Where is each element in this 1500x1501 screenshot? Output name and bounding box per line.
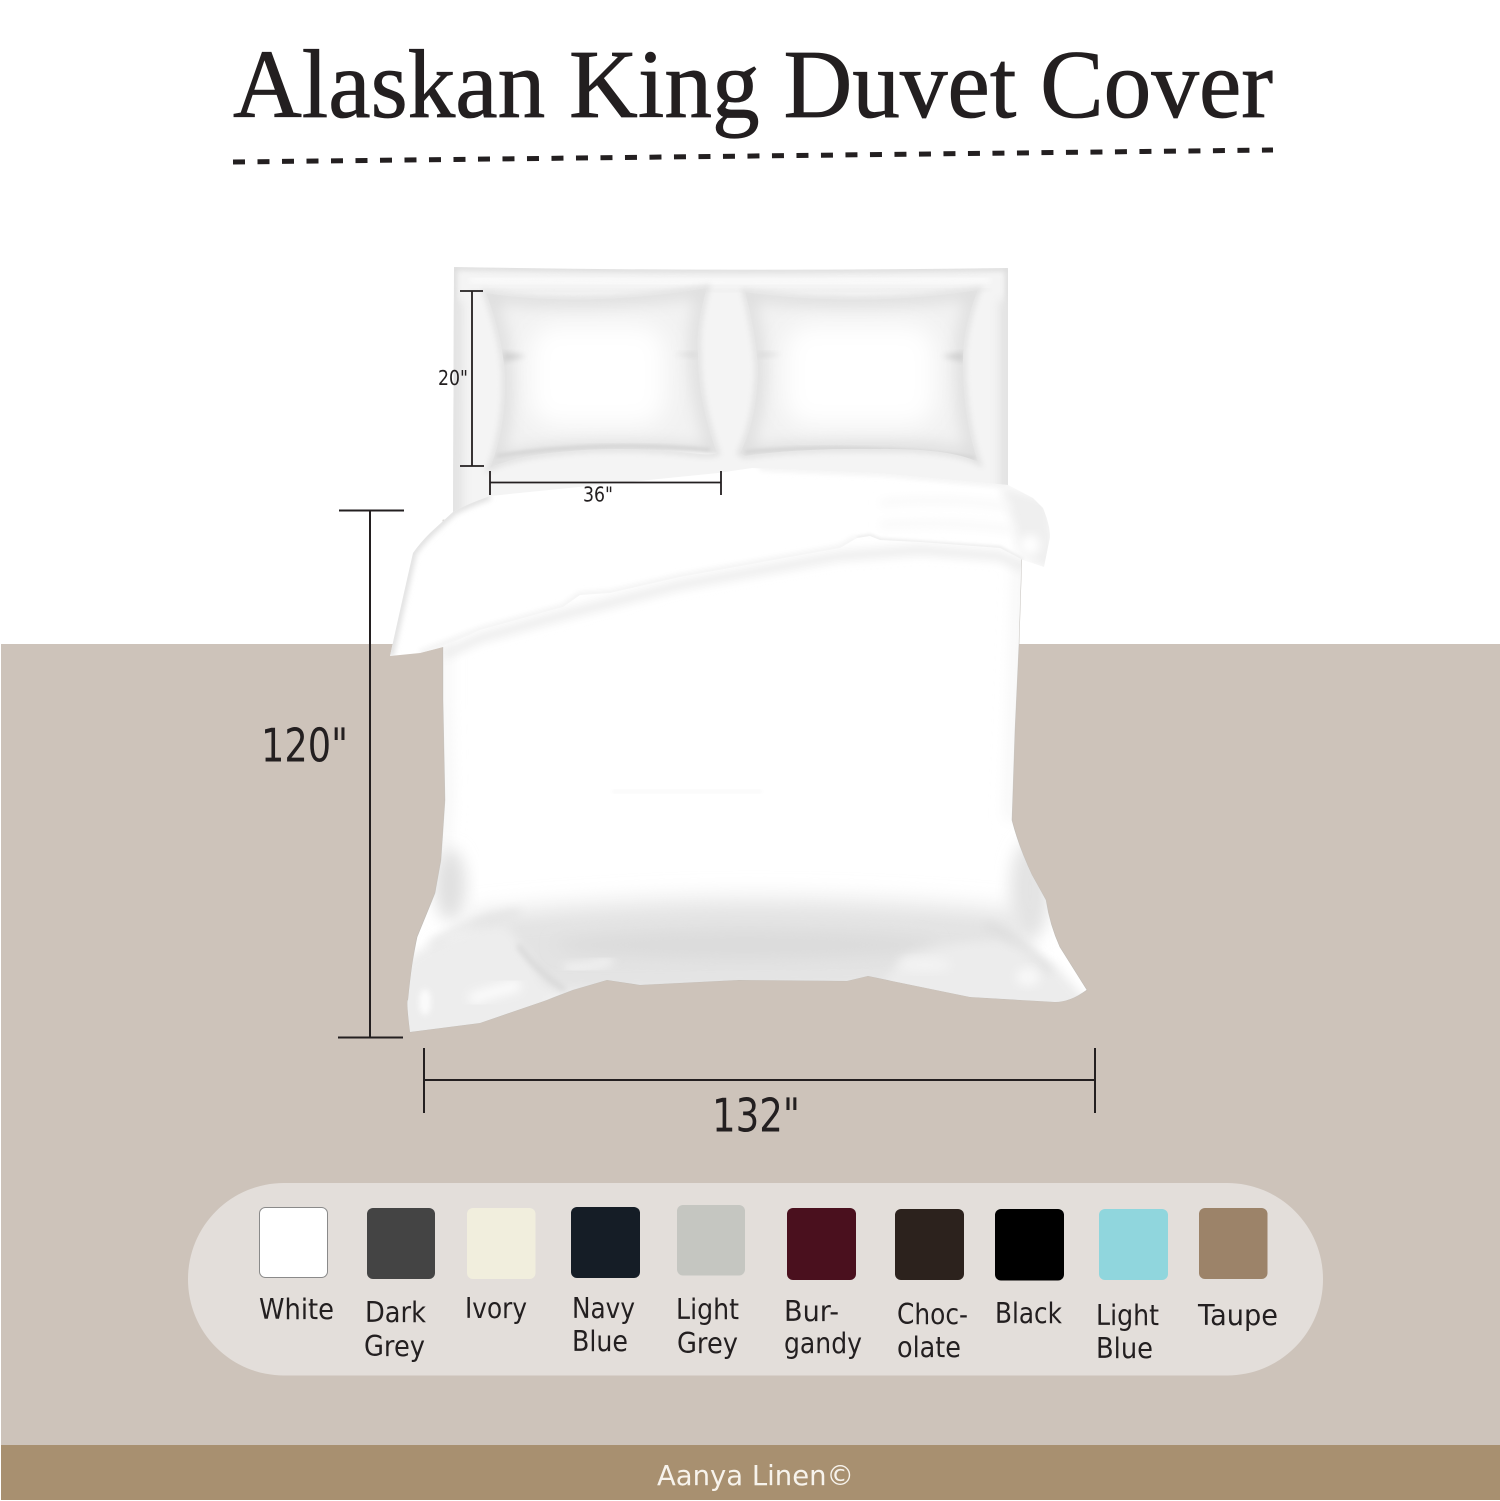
swatch: Chocolate: Choc- (897, 1298, 968, 1331)
swatch: Burgundy (784, 1208, 862, 1360)
duvet body (400, 520, 1100, 1050)
swatch: Dark Grey: Dark (365, 1296, 426, 1329)
duvet width dimension (424, 1048, 1095, 1142)
swatch: Chocolate: olate (897, 1331, 961, 1364)
pillow width dimension (490, 471, 721, 506)
swatch: Navy Blue: Navy (572, 1292, 635, 1325)
swatch: Light Blue (1096, 1209, 1168, 1365)
swatch: Taupe: Taupe (1197, 1299, 1278, 1332)
swatch: Chocolate (895, 1209, 968, 1364)
headboard (453, 267, 1008, 520)
duvet length dimension (261, 510, 404, 1038)
swatch: Black (995, 1209, 1064, 1330)
colour palette panel (188, 1183, 1323, 1376)
swatch: White (259, 1208, 334, 1326)
swatch: Taupe (1197, 1208, 1278, 1332)
swatch: Light Grey: Grey (677, 1327, 738, 1360)
label: 132 inches: 132" (712, 1088, 800, 1142)
label: 120 inches: 120" (261, 718, 348, 772)
duvet fold (390, 468, 1056, 656)
label: 20 inches: 20" (438, 366, 468, 390)
swatch: Dark Grey: Grey (364, 1330, 425, 1363)
footer band (1, 1445, 1500, 1500)
footer credit: Aanya Linen© (657, 1459, 854, 1492)
swatch: Light Blue: Light (1096, 1299, 1159, 1332)
swatch: Ivory: Ivory (465, 1292, 527, 1325)
title: Alaskan King Duvet Cover (233, 31, 1273, 138)
swatch: Light Blue: Blue (1096, 1332, 1153, 1365)
swatch: Light Grey (676, 1205, 745, 1360)
swatch: Burgundy: gandy (784, 1327, 862, 1360)
pillow height dimension (438, 291, 484, 466)
swatch: Light Grey: Light (676, 1293, 739, 1326)
bed illustration (390, 267, 1100, 1050)
right pillow (740, 290, 978, 462)
swatch: White: White (259, 1293, 334, 1326)
swatch: Ivory (465, 1208, 536, 1325)
swatch: Burgundy: Bur- (784, 1295, 839, 1328)
dashed title underline (233, 150, 1273, 162)
label: 36 inches: 36" (583, 482, 613, 506)
swatch: Navy Blue (571, 1207, 640, 1358)
swatch: Dark Grey (364, 1208, 435, 1363)
left pillow (486, 288, 720, 470)
swatch: Navy Blue: Blue (572, 1325, 628, 1358)
palette background (188, 1183, 1323, 1376)
floor panel (1, 644, 1500, 1445)
swatch: Black: Black (995, 1297, 1062, 1330)
